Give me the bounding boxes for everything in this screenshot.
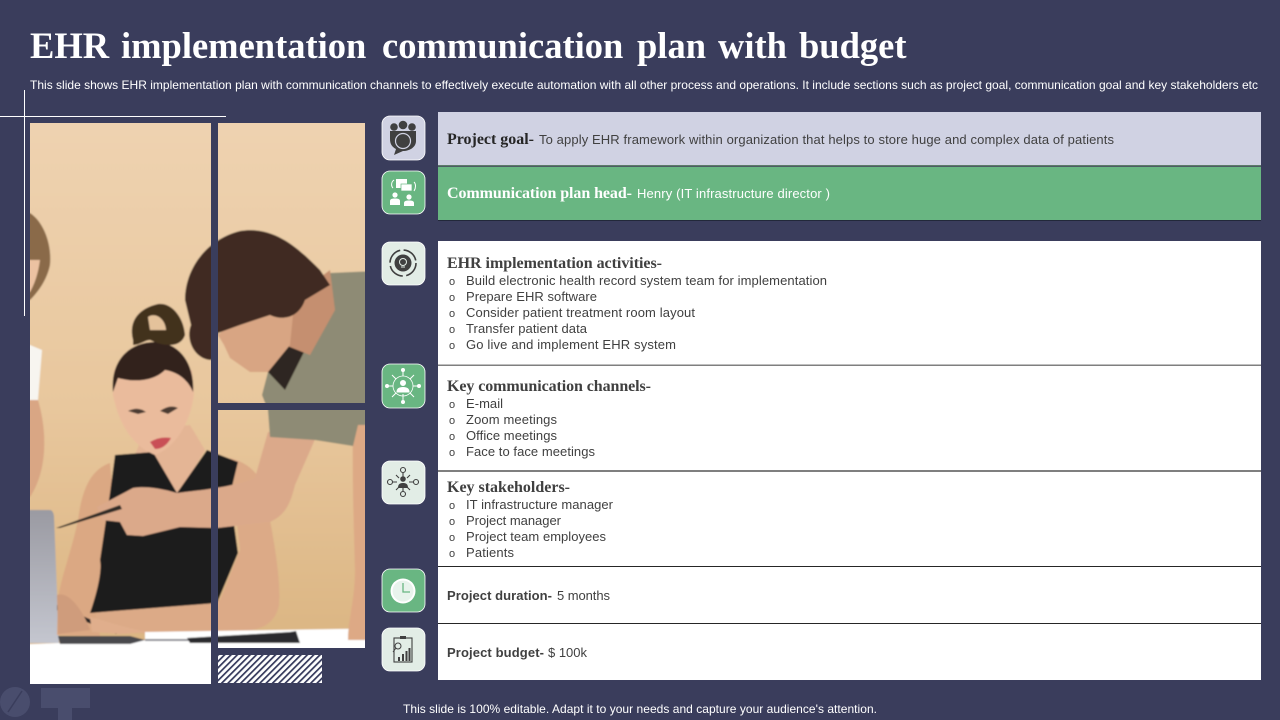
panel: project goal bbox=[438, 112, 1261, 166]
table bbox=[30, 628, 365, 684]
section: key stakeholders: Key stakeholders- bbox=[447, 479, 570, 496]
footer note: This slide is 100% editable. Adapt it to your needs and capture your audience's attention. bbox=[403, 702, 877, 716]
section: EHR implementation activities: Build electronic health record system team for implementation bbox=[466, 273, 827, 288]
section: EHR implementation activities: o bbox=[449, 276, 455, 288]
section: key communication channels: o bbox=[449, 415, 455, 427]
panel: project goal: To apply EHR framework within organization that helps to store huge and complex data of patients bbox=[539, 132, 1114, 147]
section: EHR implementation activities: Go live and implement EHR system bbox=[466, 337, 676, 352]
section: EHR implementation activities: o bbox=[449, 324, 455, 336]
section: key communication channels: Face to face meetings bbox=[466, 444, 596, 459]
title: EHR bbox=[30, 25, 110, 66]
panel: communication plan head: Communication plan head- bbox=[447, 185, 632, 202]
woman at left edge bbox=[30, 212, 52, 497]
standing man bbox=[104, 229, 365, 641]
title: implementation bbox=[121, 25, 366, 66]
section: key stakeholders: Patients bbox=[466, 545, 514, 560]
section: key communication channels: Office meetings bbox=[466, 428, 558, 443]
section: key communication channels: o bbox=[449, 447, 455, 459]
section: key stakeholders: Project team employees bbox=[466, 529, 606, 544]
section: key stakeholders: IT infrastructure manager bbox=[466, 497, 614, 512]
panel: communication plan head bbox=[438, 167, 1261, 221]
section: project duration bbox=[447, 588, 610, 603]
icon: project goal team bbox=[382, 116, 425, 160]
section: key communication channels bbox=[447, 378, 651, 459]
icon: activities cycle bulb bbox=[382, 242, 425, 285]
section: project budget: Project budget- bbox=[447, 645, 544, 660]
decorative crosshair lines bbox=[0, 90, 226, 316]
panel: project goal: Project goal- bbox=[447, 131, 534, 148]
section: EHR implementation activities: Transfer patient data bbox=[466, 321, 588, 336]
panel: white details background bbox=[438, 241, 1261, 680]
section: key stakeholders: Project manager bbox=[466, 513, 562, 528]
section: key communication channels: Key communication channels- bbox=[447, 378, 651, 395]
section: key stakeholders: o bbox=[449, 548, 455, 560]
watermark: faded medical icons bbox=[0, 687, 90, 720]
section: key communication channels: o bbox=[449, 431, 455, 443]
section: EHR implementation activities: Prepare EHR software bbox=[466, 289, 597, 304]
section: EHR implementation activities: o bbox=[449, 292, 455, 304]
section: EHR implementation activities: Consider patient treatment room layout bbox=[466, 305, 695, 320]
section: project duration: 5 months bbox=[557, 588, 610, 603]
section: key stakeholders bbox=[447, 479, 614, 560]
section: key stakeholders: o bbox=[449, 500, 455, 512]
icon: communication channels hub bbox=[382, 364, 425, 408]
icon: project duration clock bbox=[382, 569, 425, 612]
section: key stakeholders: o bbox=[449, 516, 455, 528]
section: key communication channels: o bbox=[449, 399, 455, 411]
subtitle: This slide shows EHR implementation plan with communication channels to effectively execute automation with all other process and operations. It include sections such as project goal, communication goal and key stakeholders etc bbox=[30, 78, 1258, 92]
section: key communication channels: Zoom meetings bbox=[466, 412, 558, 427]
photo: colleagues working at a laptop bbox=[30, 123, 365, 684]
panel: communication plan head: Henry (IT infrastructure director ) bbox=[637, 186, 830, 201]
hatched accent block bbox=[218, 655, 322, 683]
section: key communication channels: E-mail bbox=[466, 396, 503, 411]
laptop bbox=[30, 509, 60, 644]
section: key stakeholders: o bbox=[449, 532, 455, 544]
title: plan bbox=[637, 25, 706, 66]
title: communication bbox=[382, 25, 623, 66]
seated woman bbox=[57, 304, 279, 636]
section: EHR implementation activities: EHR implementation activities- bbox=[447, 255, 662, 272]
section: project duration: Project duration- bbox=[447, 588, 552, 603]
title: with bbox=[718, 25, 787, 66]
icon: communication plan head bbox=[382, 171, 425, 214]
icon: stakeholders network bbox=[382, 461, 425, 504]
section: EHR implementation activities bbox=[447, 255, 827, 352]
title: budget bbox=[799, 25, 907, 66]
section: project budget: $ 100k bbox=[548, 645, 588, 660]
section: EHR implementation activities: o bbox=[449, 308, 455, 320]
pencil bbox=[56, 505, 122, 528]
icon: project budget report bbox=[382, 628, 425, 671]
section: EHR implementation activities: o bbox=[449, 340, 455, 352]
section: project budget bbox=[447, 645, 588, 660]
